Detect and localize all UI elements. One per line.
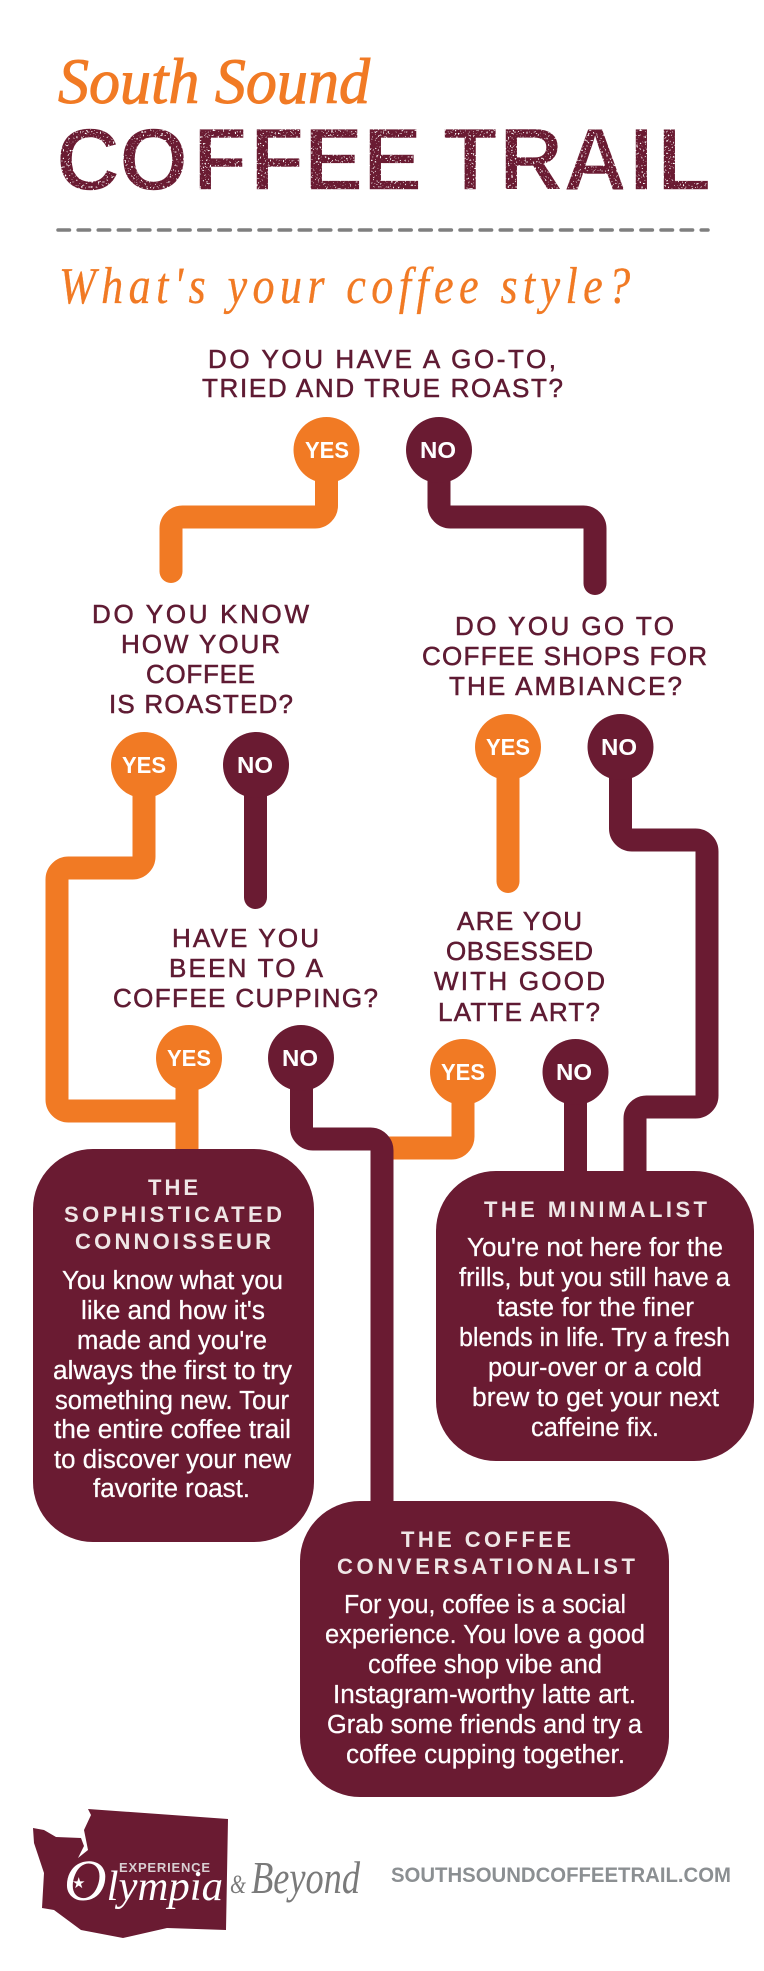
text: connoisseur description: You know what you <box>62 1267 283 1295</box>
yes button: latte art: YES <box>441 1059 485 1085</box>
question: coffee shop ambiance <box>422 611 707 701</box>
question: latte art: WITH GOOD <box>434 966 605 996</box>
text: minimalist description: brew to get your next <box>472 1384 719 1412</box>
yes button: go-to roast: YES <box>305 437 349 463</box>
icon: Washington state shape <box>33 1809 228 1938</box>
yes button: latte art <box>430 1039 496 1105</box>
no button: go-to roast: NO <box>420 437 456 463</box>
text: minimalist description: pour-over or a cold <box>488 1354 702 1382</box>
website url: SOUTHSOUNDCOFFEETRAIL.COM <box>391 1864 731 1887</box>
question: go-to roast: DO YOU HAVE A GO-TO, <box>208 344 556 374</box>
title: South Sound: South Sound <box>58 46 370 118</box>
no button: latte art: NO <box>556 1059 592 1085</box>
text: minimalist description: taste for the finer <box>497 1294 695 1322</box>
text: conversationalist description: coffee shop vibe and <box>368 1651 602 1679</box>
no button: go-to roast <box>406 417 472 483</box>
text: conversationalist description: Grab some friends and try a <box>327 1711 643 1739</box>
panel: the minimalist <box>436 1171 754 1461</box>
logo: Experience Olympia and Beyond <box>33 1809 361 1938</box>
question: coffee cupping <box>113 923 378 1013</box>
yes button: roasted: YES <box>122 752 166 778</box>
question: latte art: OBSESSED <box>446 936 593 966</box>
arrow: latte art yes path <box>390 1072 463 1148</box>
panel: the sophisticated connoisseur <box>33 1149 314 1542</box>
yes button: roasted <box>111 732 177 798</box>
yes button: cupping: YES <box>167 1045 211 1071</box>
text: conversationalist description: For you, coffee is a social <box>344 1591 626 1619</box>
question: coffee cupping: COFFEE CUPPING? <box>113 983 378 1013</box>
arrow: roasted yes path <box>57 765 187 1111</box>
heading: the sophisticated connoisseur <box>64 1175 282 1254</box>
arrow: first yes path <box>171 450 326 572</box>
no button: cupping <box>268 1025 334 1091</box>
question: coffee shop ambiance: DO YOU GO TO <box>455 611 674 641</box>
no button: roasted <box>223 732 289 798</box>
question: how coffee is roasted: COFFEE <box>146 659 255 689</box>
heading: the sophisticated connoisseur: THE <box>148 1175 198 1200</box>
arrow: cupping no path <box>302 1058 382 1515</box>
arrow: ambiance yes path <box>496 747 520 882</box>
question: latte art <box>434 906 605 1027</box>
yes button: cupping <box>156 1025 222 1091</box>
yes button: ambiance <box>475 714 541 780</box>
no button: cupping: NO <box>282 1045 318 1071</box>
text: experience: EXPERIENCE <box>119 1860 210 1875</box>
text: connoisseur description: the entire coffee trail <box>54 1416 291 1444</box>
question: coffee cupping: BEEN TO A <box>169 953 324 983</box>
question: coffee shop ambiance: THE AMBIANCE? <box>449 671 682 701</box>
heading: the sophisticated connoisseur: CONNOISSEUR <box>75 1229 271 1254</box>
question: go-to roast <box>202 344 563 403</box>
text: conversationalist description: coffee cupping together. <box>346 1741 625 1769</box>
question: how coffee is roasted <box>92 599 309 719</box>
question: coffee shop ambiance: COFFEE SHOPS FOR <box>422 641 707 671</box>
question: latte art: LATTE ART? <box>438 997 600 1027</box>
title: Coffee Trail: COFFEE TRAIL <box>56 109 711 209</box>
no button: ambiance: NO <box>601 734 637 760</box>
question: how coffee is roasted: IS ROASTED? <box>109 689 293 719</box>
heading: the minimalist: THE MINIMALIST <box>484 1197 708 1222</box>
question: coffee cupping: HAVE YOU <box>172 923 319 953</box>
text: connoisseur description: to discover your new <box>54 1446 292 1474</box>
heading: the sophisticated connoisseur: SOPHISTICATED <box>64 1202 282 1227</box>
no button: roasted: NO <box>237 752 273 778</box>
text: and Beyond: & Beyond <box>230 1852 361 1903</box>
text: conversationalist description: experience. You love a good <box>325 1621 645 1649</box>
text: connoisseur description <box>53 1267 292 1503</box>
question: how coffee is roasted: DO YOU KNOW <box>92 599 309 629</box>
arrow: cupping yes path <box>176 1058 198 1165</box>
text: Olympia: Olympia <box>64 1848 223 1913</box>
no button: ambiance <box>588 714 654 780</box>
subtitle: coffee style: What's your coffee style? <box>59 258 630 315</box>
arrow: latte art no path <box>564 1072 587 1185</box>
heading: the coffee conversationalist: CONVERSATIONALIST <box>337 1554 636 1579</box>
heading: the coffee conversationalist: THE COFFEE <box>401 1527 571 1552</box>
text: minimalist description: frills, but you still have a <box>459 1264 731 1292</box>
arrow: roasted no path <box>244 765 267 898</box>
panel: the coffee conversationalist <box>300 1501 669 1797</box>
text: minimalist description: caffeine fix. <box>531 1414 659 1442</box>
heading: the coffee conversationalist <box>337 1527 636 1579</box>
icon: star: ★ <box>72 1875 85 1892</box>
text: connoisseur description: made and you're <box>77 1327 267 1355</box>
text: minimalist description: You're not here for the <box>467 1234 723 1262</box>
arrow: first no path <box>439 450 595 584</box>
text: minimalist description: blends in life. Try a fresh <box>459 1324 730 1352</box>
question: go-to roast: TRIED AND TRUE ROAST? <box>202 373 563 403</box>
question: how coffee is roasted: HOW YOUR <box>121 629 280 659</box>
question: latte art: ARE YOU <box>457 906 582 936</box>
dashed divider <box>58 228 708 232</box>
no button: latte art <box>542 1039 608 1105</box>
text: conversationalist description <box>325 1591 645 1769</box>
text: connoisseur description: favorite roast. <box>93 1475 250 1503</box>
text: conversationalist description: Instagram-worthy latte art. <box>333 1681 636 1709</box>
arrow: ambiance no path <box>620 747 707 1185</box>
text: minimalist description <box>459 1234 731 1442</box>
yes button: ambiance: YES <box>486 734 530 760</box>
text: connoisseur description: something new. Tour <box>55 1387 289 1415</box>
yes button: go-to roast <box>294 417 360 483</box>
text: connoisseur description: always the first to try <box>53 1357 292 1385</box>
text: connoisseur description: like and how it's <box>81 1297 265 1325</box>
